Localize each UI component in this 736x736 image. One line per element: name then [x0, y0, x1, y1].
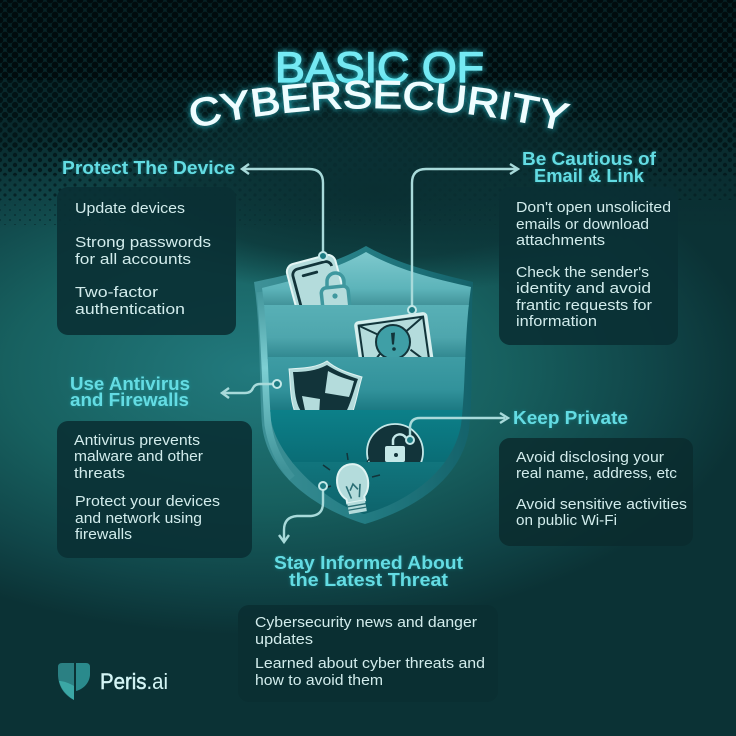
text: cautious list: Check the sender's	[516, 264, 649, 281]
text: protect list: Two-factor	[75, 284, 158, 301]
text: cautious list: information	[516, 313, 597, 330]
text: cautious list: emails or download	[516, 216, 649, 233]
heading: keep private: Keep Private	[513, 408, 628, 428]
arrow: protect the device connector	[242, 164, 327, 260]
panel: protect the device	[57, 187, 236, 335]
text: private list: Avoid sensitive activities	[516, 496, 687, 513]
text: protect list: authentication	[75, 301, 185, 318]
title	[186, 44, 574, 133]
band 3	[268, 357, 466, 412]
text: informed list: updates	[255, 631, 313, 648]
text: private list: real name, address, etc	[516, 465, 678, 482]
panel: stay informed	[238, 605, 498, 702]
text: protect list	[75, 200, 211, 318]
heading: stay informed: Stay Informed About	[274, 553, 463, 573]
icon: light bulb	[323, 453, 380, 515]
panel: be cautious	[499, 187, 678, 345]
icon: envelope alert	[354, 312, 434, 357]
text: private list	[516, 449, 687, 529]
rim highlight	[260, 292, 292, 478]
text: antivirus list: malware and other	[74, 448, 203, 465]
shield	[250, 245, 485, 527]
text: cautious list	[516, 199, 671, 330]
panel: use antivirus	[57, 421, 252, 558]
text: informed list: Cybersecurity news and danger	[255, 614, 477, 631]
text: private list: Avoid disclosing your	[516, 449, 664, 466]
text: cautious list: identity and avoid	[516, 280, 651, 297]
text: informed list: Learned about cyber threats and	[255, 655, 485, 672]
text: informed list: how to avoid them	[255, 672, 383, 689]
text: antivirus list: and network using	[75, 510, 202, 527]
heading: stay informed	[274, 553, 463, 590]
heading: be cautious: Be Cautious of	[522, 149, 657, 169]
logo	[58, 663, 168, 700]
heading: use antivirus: and Firewalls	[70, 390, 189, 410]
text: antivirus list	[74, 432, 220, 543]
heading: use antivirus	[70, 374, 190, 410]
text: protect list: Strong passwords	[75, 234, 211, 251]
logo icon	[58, 663, 90, 700]
heading: be cautious: Email & Link	[534, 166, 645, 186]
text: protect list: Update devices	[75, 200, 185, 217]
text: antivirus list: firewalls	[75, 526, 132, 543]
icon: small shield	[288, 360, 363, 410]
arrow: keep private connector	[406, 413, 508, 444]
text: informed list	[255, 614, 485, 689]
heading: stay informed: the Latest Threat	[289, 570, 448, 590]
band 4	[270, 410, 462, 463]
icon: phone with lock	[286, 254, 351, 305]
band 1	[262, 252, 471, 306]
text: cautious list: Don't open unsolicited	[516, 199, 671, 216]
title line: cybersecurity: CYBERSECURITY	[186, 76, 574, 133]
icon: open lock circle	[366, 423, 424, 462]
text: cautious list: frantic requests for	[516, 297, 652, 314]
band 2	[264, 305, 469, 359]
title line: basic of: BASIC OF	[275, 44, 484, 92]
shield rim	[254, 246, 473, 524]
text: private list: on public Wi-Fi	[516, 512, 617, 529]
logo text: Peris.ai	[100, 669, 168, 694]
arrow: antivirus connector	[222, 380, 281, 398]
text: antivirus list: Antivirus prevents	[74, 432, 200, 449]
text: antivirus list: threats	[74, 465, 125, 482]
arrow: stay informed connector	[279, 482, 327, 542]
band 5	[293, 462, 444, 514]
panel: keep private	[499, 438, 693, 546]
heading: use antivirus: Use Antivirus	[70, 374, 190, 394]
heading: be cautious	[522, 149, 657, 186]
arrow: be cautious connector	[408, 164, 518, 314]
text: antivirus list: Protect your devices	[75, 493, 220, 510]
heading: protect the device: Protect The Device	[62, 158, 235, 178]
text: cautious list: attachments	[516, 232, 605, 249]
text: protect list: for all accounts	[75, 251, 191, 268]
